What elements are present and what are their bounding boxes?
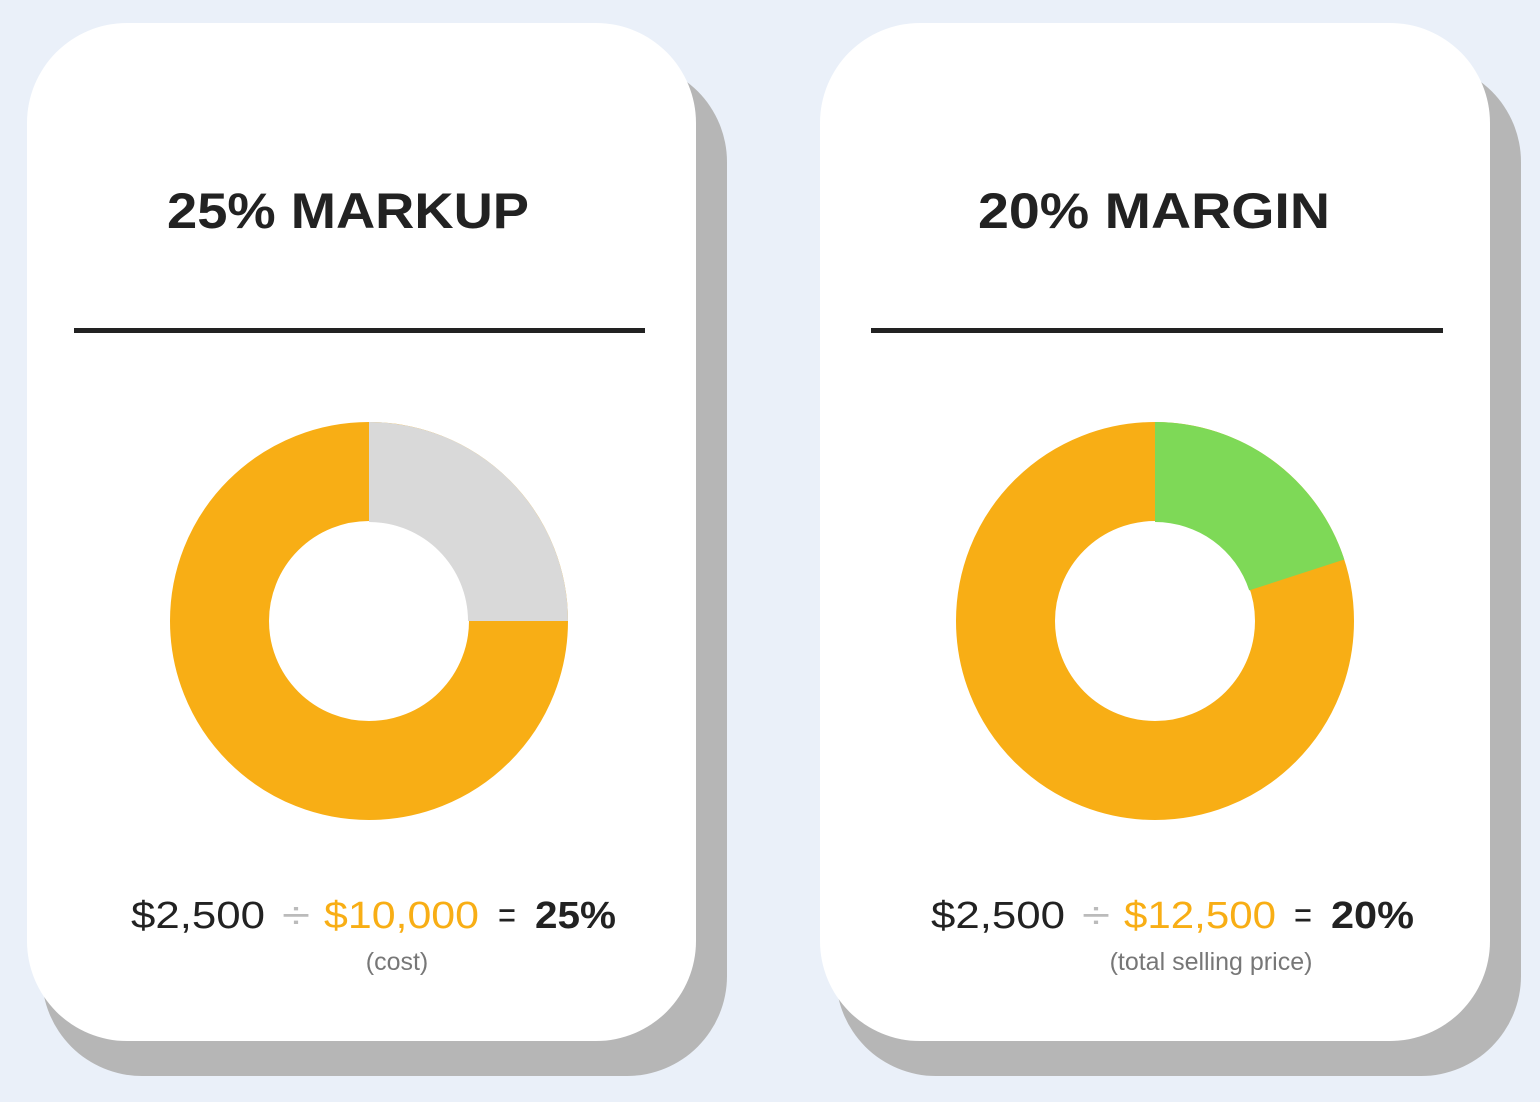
formula: markup: $2,500 (131, 895, 265, 937)
formula: margin: ÷ (1082, 895, 1110, 937)
formula: margin: $2,500 (931, 895, 1065, 937)
panel: margin (820, 23, 1521, 1076)
donut chart: markup (220, 422, 568, 770)
formula: margin: 20% (1331, 895, 1414, 937)
formula: markup: = (498, 895, 516, 937)
formula: markup: 25% (535, 895, 616, 937)
formula: margin (931, 895, 1414, 976)
formula: margin: = (1294, 895, 1312, 937)
heading: 20% margin: 20% MARGIN (978, 183, 1330, 239)
formula: markup (131, 895, 616, 976)
formula: markup: ÷ (282, 895, 310, 937)
heading: 25% markup: 25% MARKUP (167, 183, 529, 239)
formula: margin: (total selling price) (1110, 948, 1312, 976)
formula: margin: $12,500 (1124, 895, 1276, 937)
formula: markup: $10,000 (324, 895, 479, 937)
donut chart: margin (1006, 422, 1344, 770)
panel: markup (27, 23, 727, 1076)
formula: markup: (cost) (366, 948, 428, 976)
